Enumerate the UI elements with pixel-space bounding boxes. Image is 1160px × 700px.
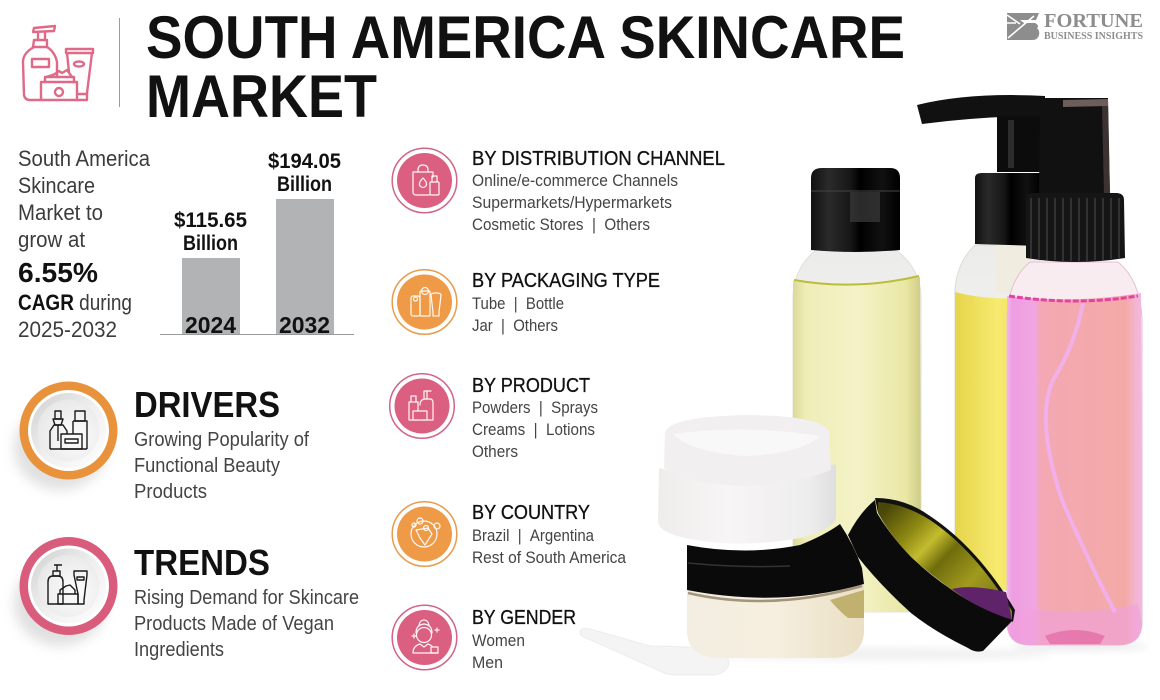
panel: by distribution channel: Cosmetic Stores | Others [472,215,650,234]
panel: by product: Powders | Sprays [472,398,598,417]
floor shadow [710,642,1148,660]
panel: by country [472,502,626,567]
panel: by gender: Women [472,631,525,650]
title [146,4,905,130]
icon: drivers badge [14,382,118,490]
trends text: Products Made of Vegan [134,613,334,635]
header icon: skincare products [23,26,93,100]
trends text: TRENDS [134,542,270,583]
panel: by country: Brazil | Argentina [472,526,594,545]
title: SOUTH AMERICA SKINCARE [146,4,905,71]
bar chart: market size [160,150,354,338]
panel: by country: Rest of South America [472,548,626,567]
icon: packaging type [392,270,457,334]
logo: Fortune Business Insights: FORTUNE [1044,10,1143,32]
icon: gender [392,605,457,670]
icon: country [392,502,457,566]
drivers text [134,384,309,503]
trends text [134,542,359,661]
panel: by gender [472,607,576,672]
panel: by distribution channel: BY DISTRIBUTION CHANNEL [472,148,725,170]
panel: by distribution channel [472,148,725,234]
clear bottle with pale oil [793,168,921,612]
bar chart: market size: Billion [277,173,332,196]
market summary text: CAGR during [18,290,132,315]
bar chart: market size: 2024 [185,312,236,338]
bar chart: market size: $115.65 [174,209,247,232]
panel: by distribution channel: Online/e-commerce Channels [472,171,678,190]
panel: by product [472,375,598,461]
logo: Fortune Business Insights: BUSINESS INSIGHTS [1044,31,1143,42]
divider [119,18,120,107]
market summary text: 6.55% [18,257,98,288]
market summary text [18,146,151,342]
market summary text: Market to [18,200,103,225]
drivers text: DRIVERS [134,384,280,425]
icon: distribution channel [392,148,457,213]
panel: by country: BY COUNTRY [472,502,590,524]
bar chart: market size: Billion [183,232,238,255]
photo: skincare bottles and jars [580,95,1148,675]
drivers text: Products [134,481,207,503]
bar chart: market size: $194.05 [268,150,341,173]
trends text: Ingredients [134,639,224,661]
panel: by product: Creams | Lotions [472,420,595,439]
icon: trends badge [14,537,118,646]
pink spray bottle [1007,98,1142,645]
panel: by packaging type: Tube | Bottle [472,294,564,313]
panel: by gender: Men [472,653,503,672]
yellow pump bottle [917,95,1045,590]
icon: product [390,374,454,438]
panel: by gender: BY GENDER [472,607,576,629]
panel: by packaging type: BY PACKAGING TYPE [472,270,660,292]
panel: by packaging type [472,270,660,335]
tilted black lid [848,498,1015,652]
trends text: Rising Demand for Skincare [134,587,359,609]
panel: by product: BY PRODUCT [472,375,590,397]
title: MARKET [146,63,377,130]
drivers text: Growing Popularity of [134,429,309,451]
spatula [580,628,729,675]
logo: Fortune Business Insights [1007,10,1143,42]
market summary text: South America [18,146,151,171]
market summary text: grow at [18,227,85,252]
drivers text: Functional Beauty [134,455,280,477]
market summary text: 2025-2032 [18,317,117,342]
panel: by distribution channel: Supermarkets/Hypermarkets [472,193,672,212]
stacked cream jars [658,415,864,658]
market summary text: Skincare [18,173,95,198]
panel: by packaging type: Jar | Others [472,316,558,335]
panel: by product: Others [472,442,518,461]
bar chart: market size: 2032 [279,312,330,338]
